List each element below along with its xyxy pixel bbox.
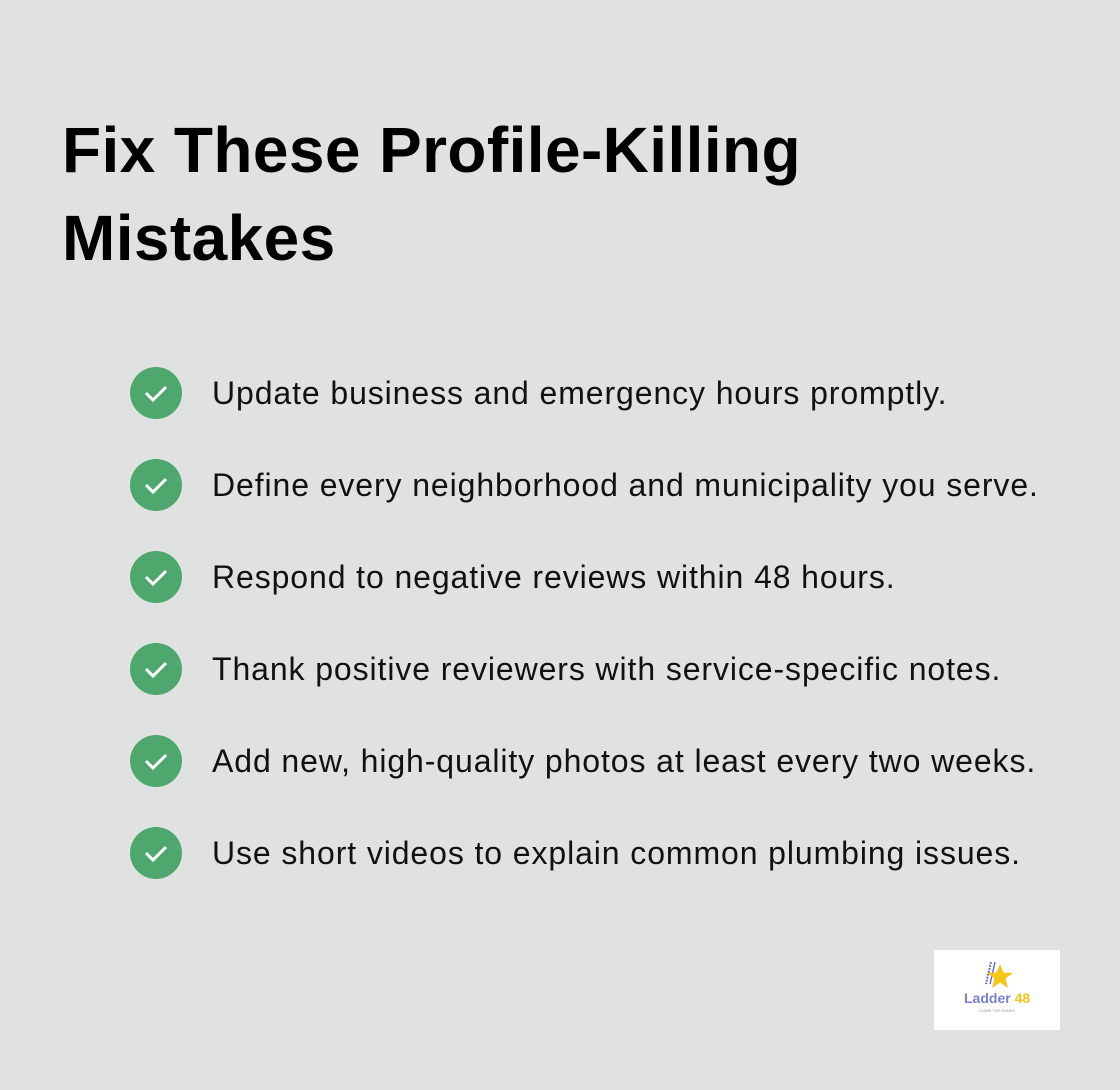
logo: CLIMB THE RANKS [979,1008,1015,1013]
item 6: Use short videos to explain common plumbing issues. [212,835,1021,871]
title [62,114,801,274]
item 2 [130,459,1039,511]
item 6 [130,827,1021,879]
title: Mistakes [62,202,336,274]
item 5: Add new, high-quality photos at least every two weeks. [212,743,1036,779]
logo: Ladder 48 [964,990,1030,1006]
logo [934,950,1060,1030]
item 1 [130,367,947,419]
item 3 [130,551,896,603]
item 4 [130,643,1001,695]
item 2: Define every neighborhood and municipality you serve. [212,467,1039,503]
title: Fix These Profile-Killing [62,114,801,186]
item 3: Respond to negative reviews within 48 hours. [212,559,896,595]
item 4: Thank positive reviewers with service-specific notes. [212,651,1001,687]
checklist [130,367,1039,879]
item 5 [130,735,1036,787]
item 1: Update business and emergency hours promptly. [212,375,947,411]
